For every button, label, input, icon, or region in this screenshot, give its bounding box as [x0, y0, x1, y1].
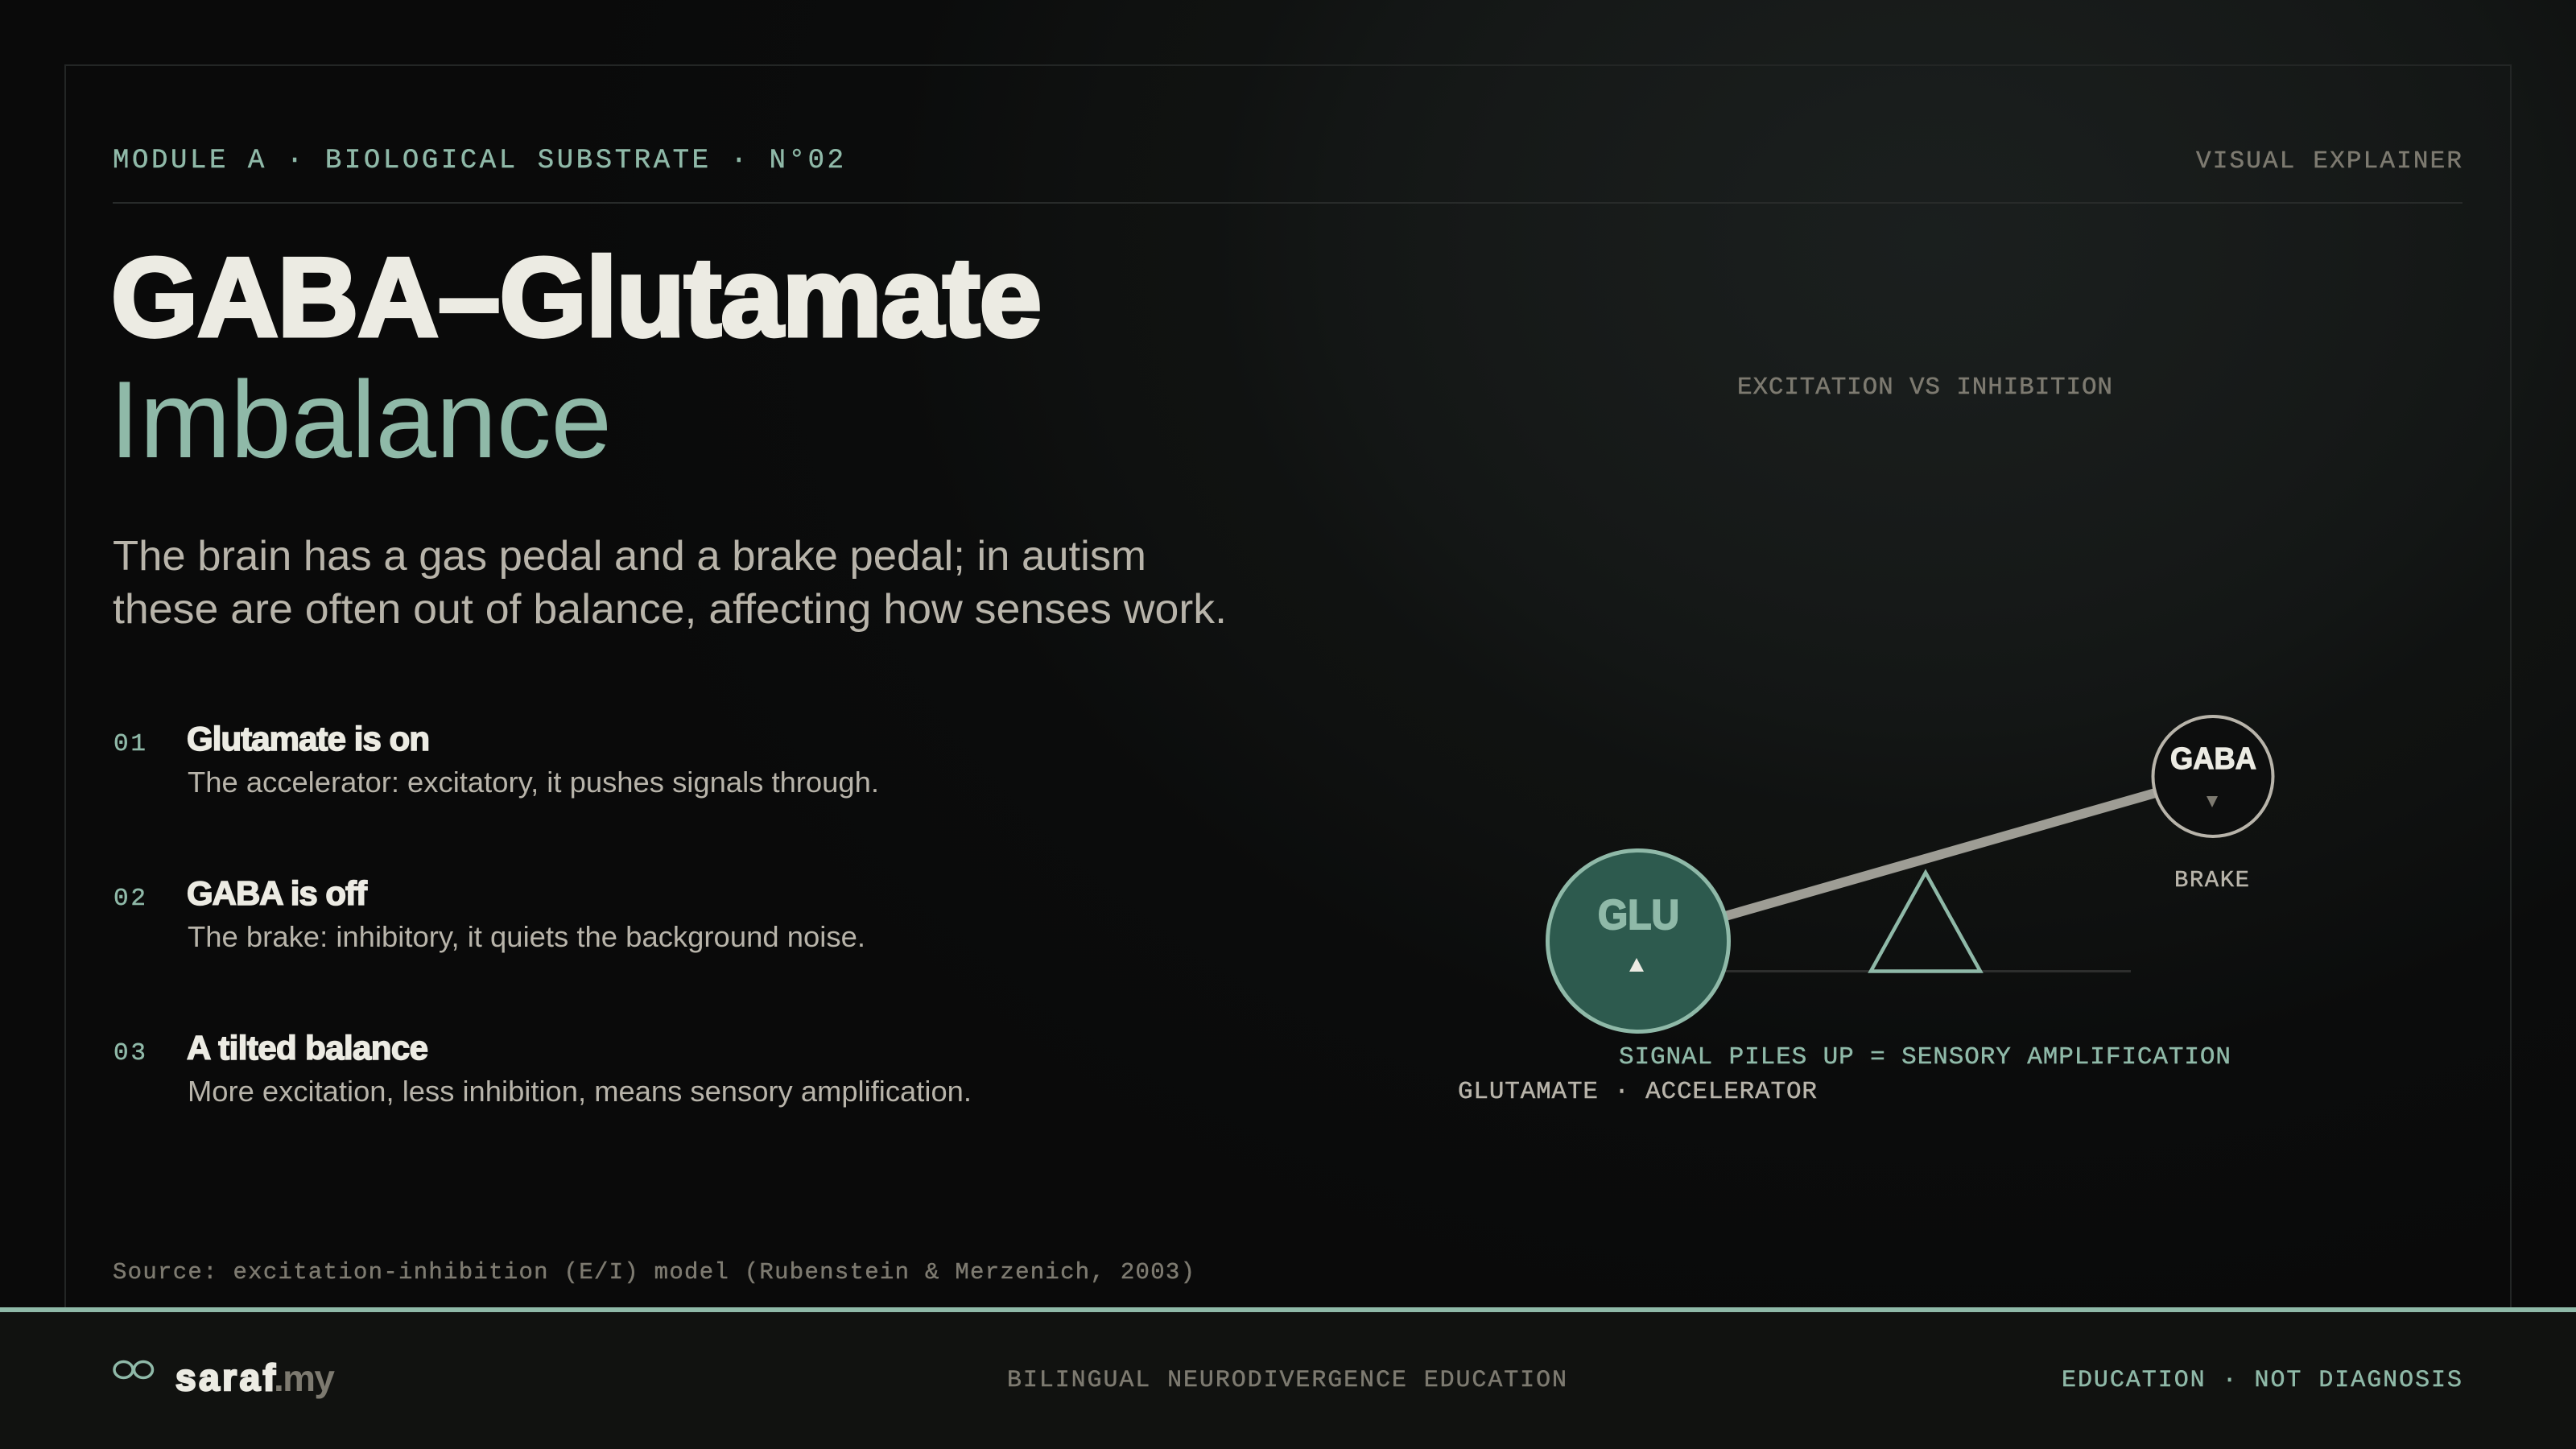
footer accent line [0, 1307, 2576, 1312]
item 01: 01 [114, 730, 146, 758]
item 03: A tilted balance [187, 1029, 428, 1067]
gaba circle [2153, 716, 2273, 836]
item 01: Glutamate is on [187, 720, 430, 758]
visual explainer label: VISUAL EXPLAINER [2196, 147, 2462, 175]
title line 1: GABA–Glutamate [111, 235, 1042, 360]
item 03: 03 [114, 1039, 146, 1067]
intro paragraph: The brain has a gas pedal and a brake pedal; in autism [113, 533, 1146, 580]
amplification caption: SIGNAL PILES UP = SENSORY AMPLIFICATION [1619, 1043, 2231, 1071]
glutamate label: GLUTAMATE · ACCELERATOR [1458, 1078, 1817, 1106]
source note: Source: excitation-inhibition (E/I) model (Rubenstein & Merzenich, 2003) [113, 1259, 1195, 1286]
logo wordmark: .my [274, 1357, 335, 1399]
header [113, 146, 2462, 204]
fulcrum [1871, 873, 1980, 971]
item 02 [114, 874, 865, 953]
title line 2: Imbalance [109, 358, 612, 481]
logo wordmark [175, 1356, 335, 1399]
item 01 [114, 720, 879, 799]
diagram heading: EXCITATION VS INHIBITION [1737, 374, 2112, 402]
gaba circle: GABA [2170, 742, 2256, 776]
logo infinity icon [114, 1362, 153, 1378]
footer [0, 1307, 2576, 1449]
footer background [0, 1312, 2576, 1449]
logo wordmark: saraf [175, 1356, 276, 1398]
glutamate circle [1547, 850, 1729, 1032]
item 03 [114, 1029, 972, 1108]
brake label: BRAKE [2174, 867, 2249, 894]
list [114, 720, 972, 1108]
beam [1638, 776, 2213, 941]
footer right text: EDUCATION · NOT DIAGNOSIS [2062, 1367, 2462, 1394]
glutamate circle: GLU [1598, 892, 1679, 939]
item 02: GABA is off [187, 874, 368, 912]
item 02: The brake: inhibitory, it quiets the background noise. [188, 920, 865, 953]
intro paragraph: these are often out of balance, affecting how senses work. [113, 586, 1227, 633]
ground line [1720, 970, 2131, 972]
item 02: 02 [114, 885, 146, 913]
item 01: The accelerator: excitatory, it pushes signals through. [188, 766, 879, 799]
footer centre text: BILINGUAL NEURODIVERGENCE EDUCATION [1007, 1367, 1567, 1394]
title [109, 235, 1042, 481]
item 03: More excitation, less inhibition, means sensory amplification. [188, 1075, 972, 1108]
module label: MODULE A · BIOLOGICAL SUBSTRATE · N°02 [113, 146, 844, 176]
intro paragraph [113, 533, 1227, 633]
header rule [113, 202, 2462, 204]
seesaw diagram [1458, 374, 2273, 1106]
